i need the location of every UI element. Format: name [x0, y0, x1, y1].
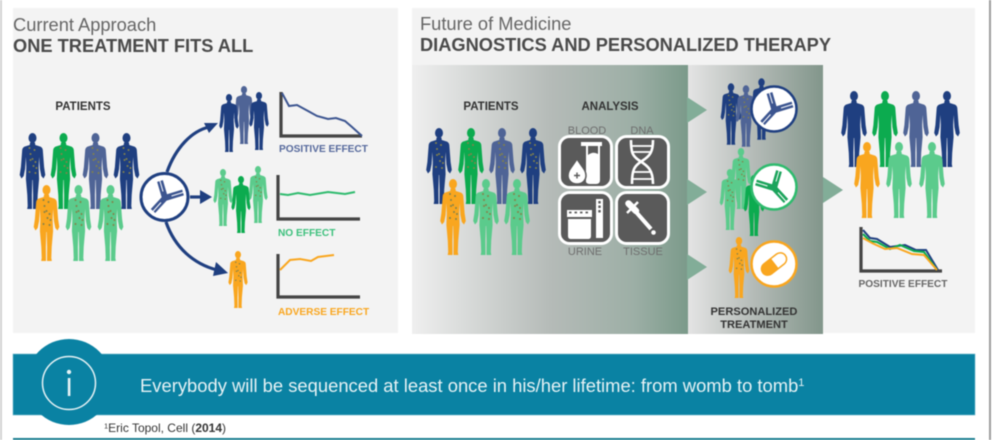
adverse effect patient	[228, 251, 248, 308]
heading: diagnostics and personalized therapy: DIAGNOSTICS AND PERSONALIZED THERAPY	[420, 34, 831, 55]
label: positive effect: POSITIVE EFFECT	[279, 144, 369, 155]
footnote: 1	[104, 422, 108, 430]
label: personalized treatment: TREATMENT	[720, 319, 788, 331]
heading: one treatment fits all: ONE TREATMENT FITS ALL	[13, 35, 253, 56]
band: patients and analysis	[412, 65, 688, 334]
text: key message: 1	[798, 377, 804, 389]
chart: outcome positive effect	[861, 227, 942, 271]
icon: antibody treatment	[141, 174, 188, 220]
heading: current approach: Current Approach	[13, 14, 156, 35]
icon: blood	[560, 136, 612, 188]
treatment: green group with antibody	[720, 148, 796, 236]
label: personalized treatment: PERSONALIZED	[711, 306, 797, 318]
label: no effect: NO EFFECT	[278, 228, 336, 239]
footnote: Eric Topol, Cell (	[108, 421, 195, 435]
outcome patients	[841, 91, 960, 218]
no effect patients	[213, 166, 268, 233]
treatment: orange patient with capsule	[729, 237, 796, 298]
label: outcome positive effect: POSITIVE EFFECT	[859, 279, 948, 290]
footnote: 2014)	[195, 421, 226, 435]
label: adverse effect: ADVERSE EFFECT	[278, 307, 370, 318]
icon: tissue dropper	[616, 192, 668, 244]
arrows from treatment	[166, 123, 228, 276]
arrows: analysis to treatment	[687, 97, 707, 280]
heading: future of medicine: Future of Medicine	[420, 13, 571, 34]
patients group	[426, 128, 546, 255]
patients group	[20, 133, 139, 261]
label: patients: PATIENTS	[463, 101, 519, 113]
arrow: treatment to outcome	[823, 177, 843, 203]
positive effect patients	[219, 86, 269, 152]
label: patients: PATIENTS	[55, 101, 111, 113]
banner: key message	[13, 339, 975, 425]
label: blood: BLOOD	[568, 125, 606, 137]
treatment: navy group with antibody	[721, 78, 796, 147]
label: dna: DNA	[630, 125, 654, 137]
icon: info badge	[26, 339, 112, 425]
band: personalized treatment	[688, 65, 823, 334]
label: tissue: TISSUE	[623, 246, 663, 258]
panel: future of medicine	[412, 8, 975, 334]
label: urine: URINE	[568, 246, 602, 258]
bottom bar	[13, 438, 975, 440]
panel: current approach	[13, 8, 398, 333]
chart: adverse effect	[278, 254, 360, 297]
icon: dna	[616, 136, 668, 188]
text: key message: Everybody will be sequenced at least once in his/her lifetime: from womb to tomb	[140, 375, 798, 396]
chart: no effect	[278, 175, 360, 219]
label: analysis: ANALYSIS	[581, 101, 639, 113]
chart: positive effect	[281, 92, 362, 136]
icon: urine	[560, 192, 612, 244]
